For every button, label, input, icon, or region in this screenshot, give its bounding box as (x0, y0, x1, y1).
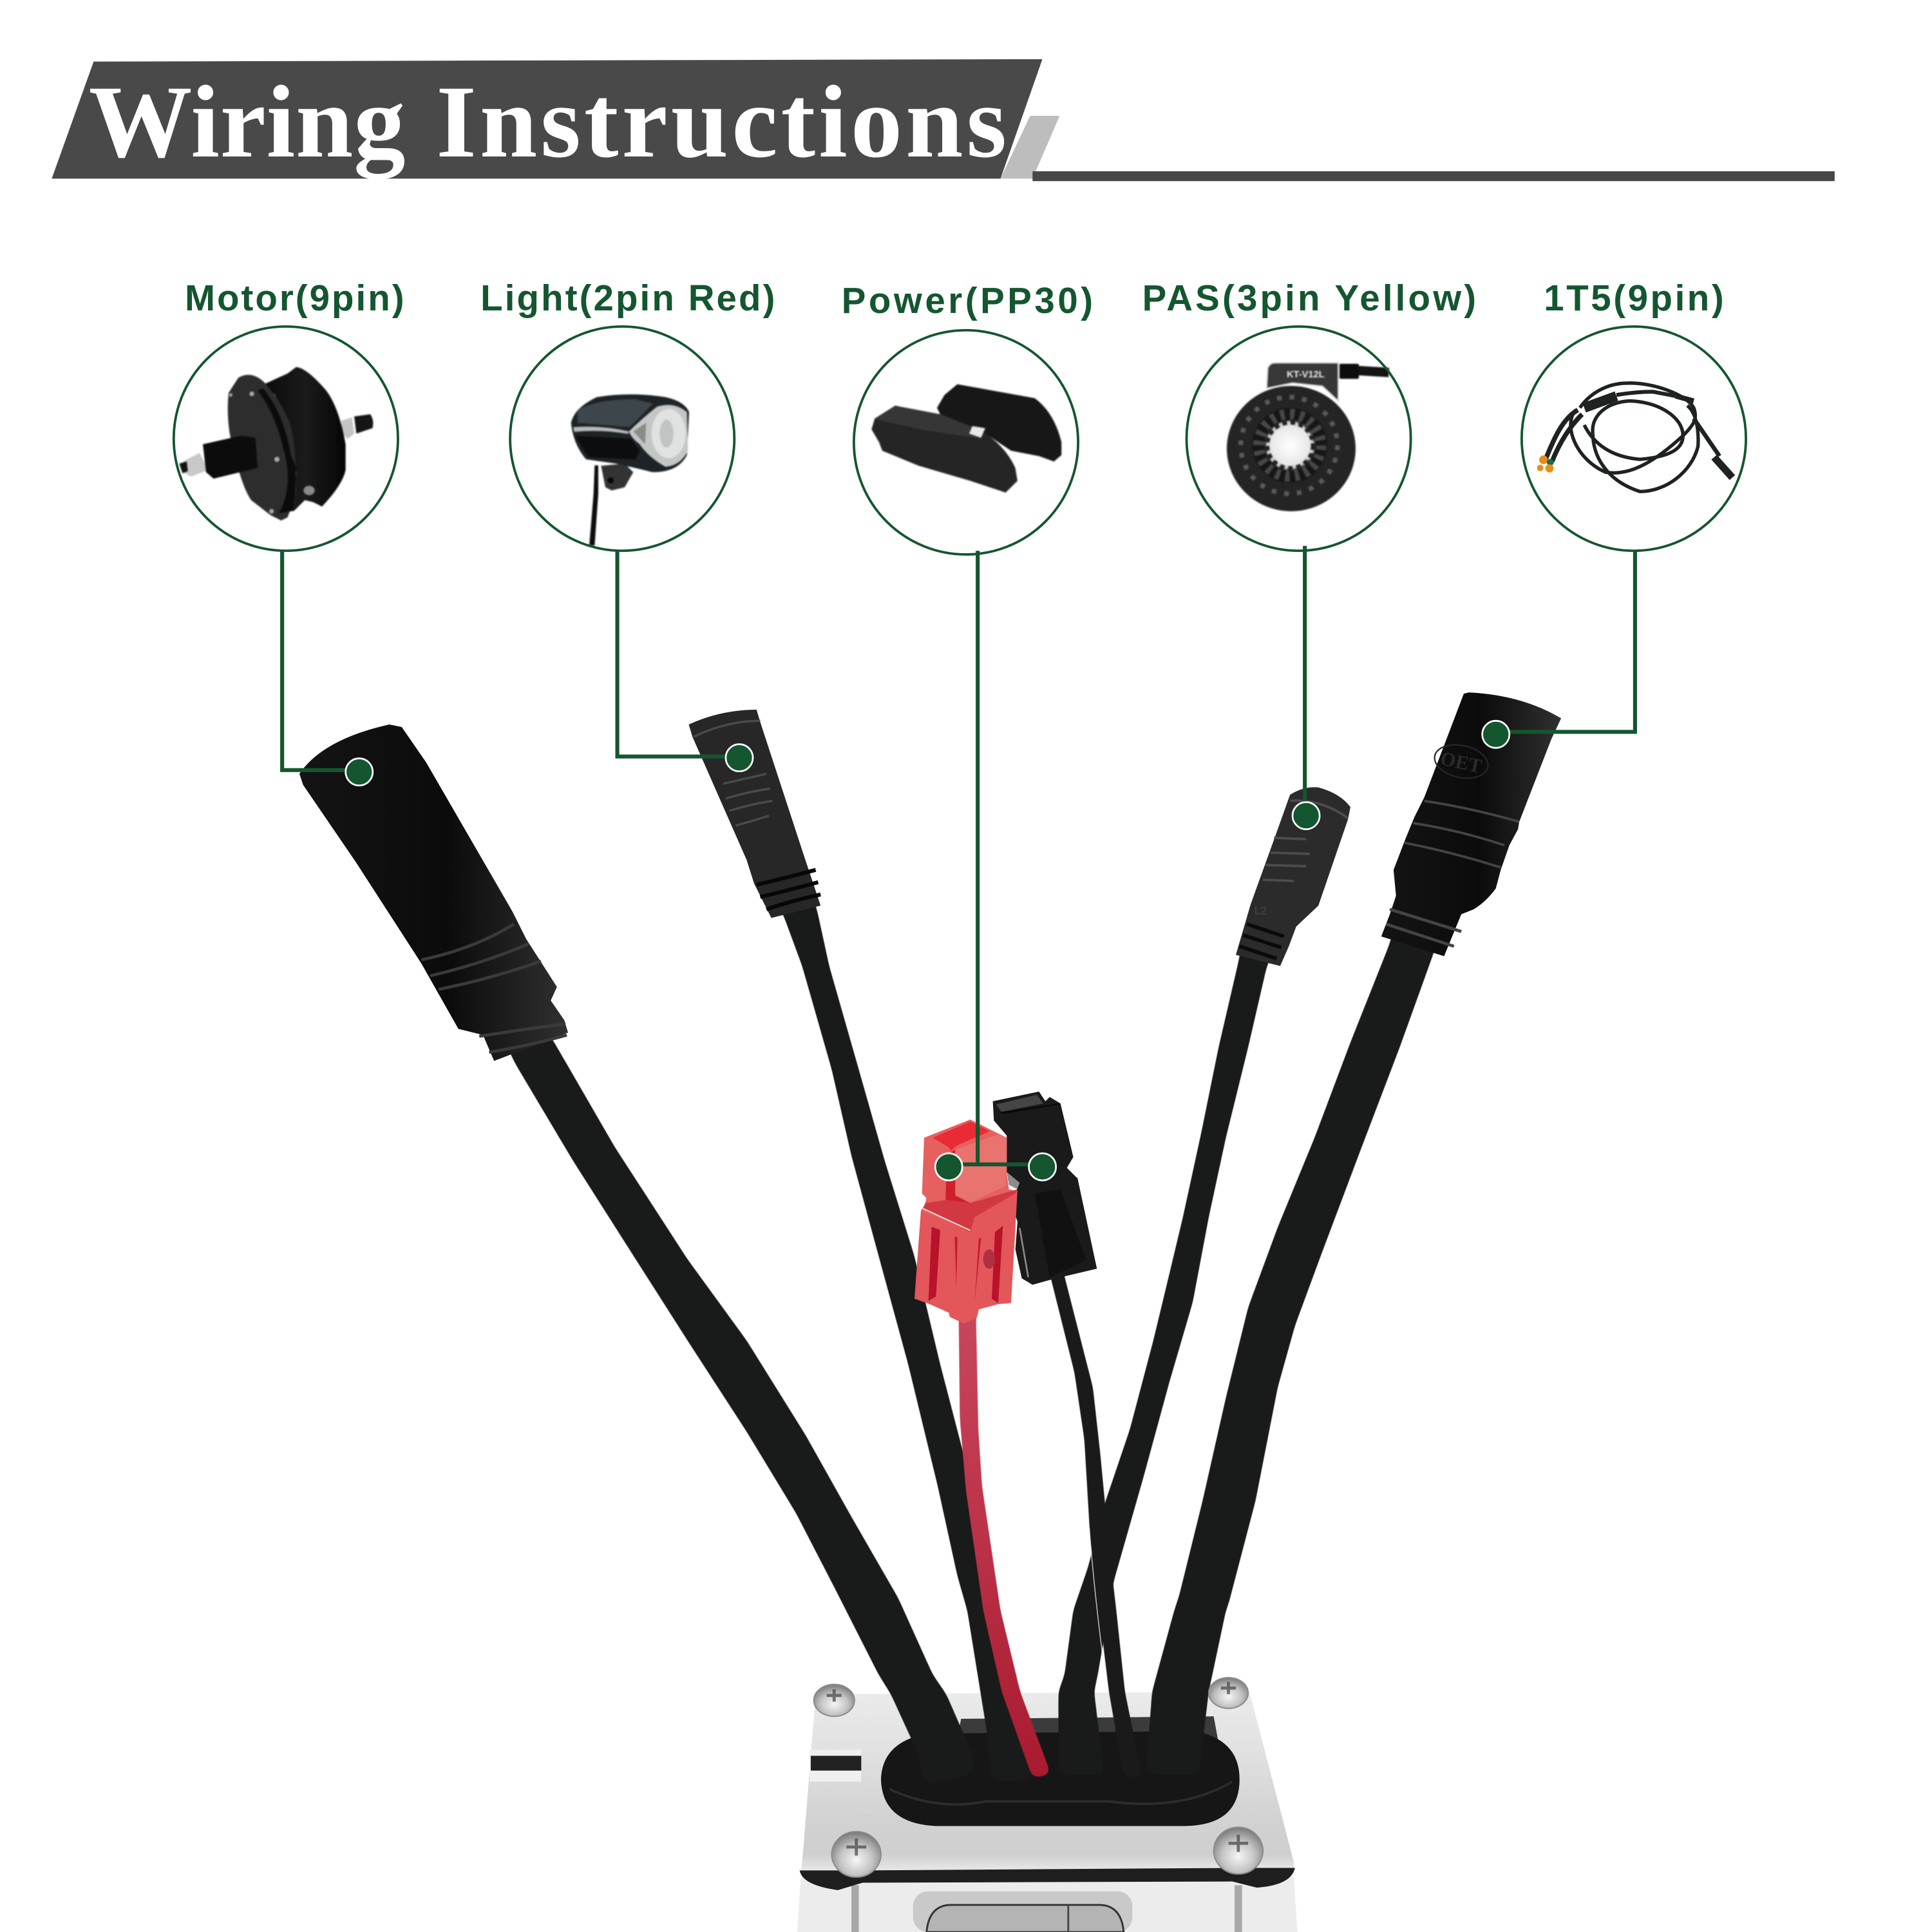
connector: red Anderson (914, 1119, 1018, 1323)
icon: 1T5 cable (1537, 383, 1732, 491)
controller grommet (881, 1716, 1240, 1826)
screws (814, 1678, 1263, 1877)
leader lines (282, 546, 1635, 1164)
cable: PAS (1058, 943, 1274, 1774)
label: light: Light(2pin Red) (480, 278, 775, 318)
label: PAS: PAS(3pin Yellow) (1142, 278, 1476, 318)
cable: motor (503, 1023, 973, 1784)
controller body (797, 1692, 1298, 1932)
title banner: Instructions (436, 64, 1007, 179)
connector: 1T5: OET (1439, 747, 1484, 777)
label: 1T5: 1T5(9pin) (1544, 278, 1724, 318)
label: power: Power(PP30) (842, 280, 1093, 321)
title banner: Wiring (89, 64, 405, 180)
connector: black Anderson (993, 1092, 1097, 1285)
icon: hub motor (179, 367, 373, 520)
icon: battery mounts (871, 384, 1061, 493)
connector: 1T5 (1381, 692, 1561, 956)
icon: headlight (571, 394, 689, 545)
connection dots (346, 721, 1510, 1180)
connector: PAS (1236, 787, 1350, 966)
icon: PAS sensor (1227, 363, 1389, 511)
connector: motor (299, 724, 568, 1061)
cable: power red (959, 1309, 1051, 1778)
connector: PAS: L2 (1255, 904, 1267, 917)
icon: PAS sensor: KT-V12L (1287, 370, 1325, 380)
label: motor: Motor(9pin) (185, 278, 404, 318)
cable: light (776, 892, 1032, 1781)
cable: 1T5 (1146, 927, 1439, 1774)
icon rings (174, 327, 1746, 554)
title banner (52, 59, 1835, 181)
cable: black power wire (1048, 1267, 1142, 1777)
connector: light (689, 710, 820, 918)
